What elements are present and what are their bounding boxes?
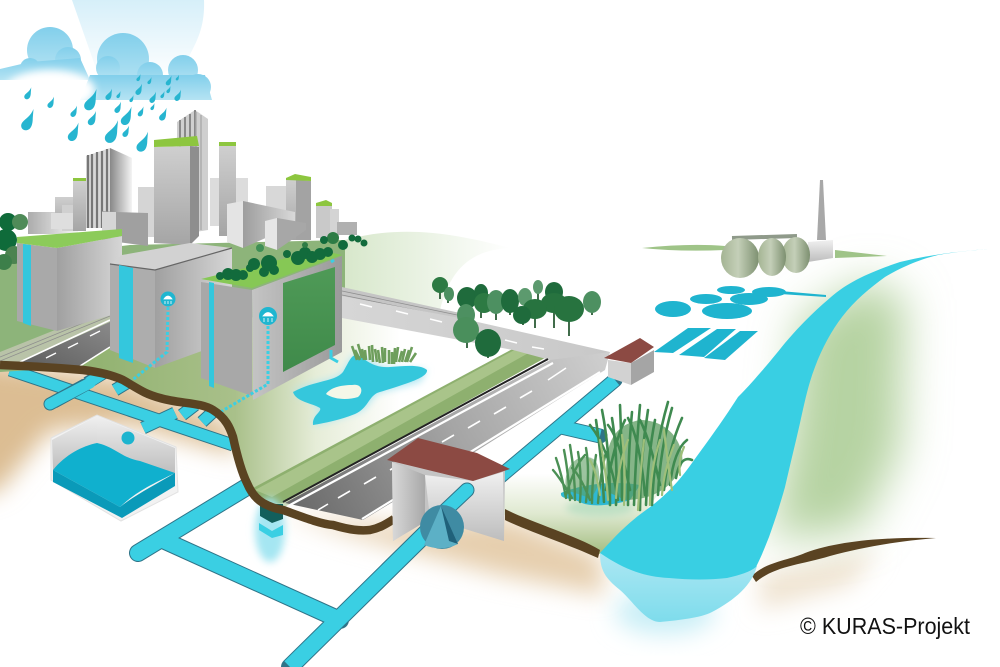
ball [122,432,134,444]
green road verge [253,345,545,505]
pond reeds [352,344,416,364]
cistern icon [259,307,277,325]
digesters [782,237,810,273]
aeration tanks [654,328,758,360]
soil line right [505,509,600,558]
background skyline [28,110,357,250]
downpipe [119,265,133,363]
tower right [286,174,311,240]
green bank right of river [770,280,905,540]
back rail track [342,287,470,330]
roof trees [216,232,368,281]
valve [420,505,464,549]
water front [53,470,175,518]
chimney [817,180,826,240]
glow under lake [615,590,715,634]
tree group [432,277,601,358]
tall back tower [177,110,208,235]
center tower [154,136,199,245]
downpipe [23,244,31,326]
downpipe [209,282,214,388]
constructed wetland [553,402,692,517]
right field [490,420,675,554]
striped tower [86,148,132,228]
back green hill [120,232,510,350]
building 3 [201,250,342,414]
green roof [201,250,342,288]
cloud highlight [5,70,95,110]
island [326,385,361,399]
water top [53,443,175,507]
soil shading [0,358,880,610]
roof [387,438,510,481]
soil line far right [752,538,936,582]
back road [342,296,610,368]
raindrops [21,74,181,152]
main road [283,352,610,520]
clouds [0,27,212,110]
reed mass [606,420,682,500]
copyright: © KURAS-Projekt [800,613,971,639]
dotted pipe [130,307,168,382]
left green terrain [0,240,345,372]
pump house front [387,438,510,549]
clarifier basins [655,286,826,319]
trees left edge [0,213,28,270]
soil line [0,365,394,530]
left rail and road [0,308,110,366]
treatment plant [642,180,887,278]
cistern icon [160,292,176,306]
building 2 [110,243,232,382]
upper pipe to back pump house [490,380,615,485]
sky light beam [72,0,204,80]
infiltration swale [255,498,285,562]
river surface [600,249,988,580]
pump house back [604,338,654,385]
building [808,240,833,262]
ground surface [0,300,540,508]
pipe network: lower [138,480,480,667]
plant green strips [642,245,887,258]
pipe network: upper [10,370,233,445]
building 1 [17,229,122,331]
green wall [283,267,335,372]
inner pipe [430,490,467,525]
river [600,249,988,622]
river bed [600,530,757,622]
pond [293,344,427,425]
underground storage tank [51,415,178,521]
